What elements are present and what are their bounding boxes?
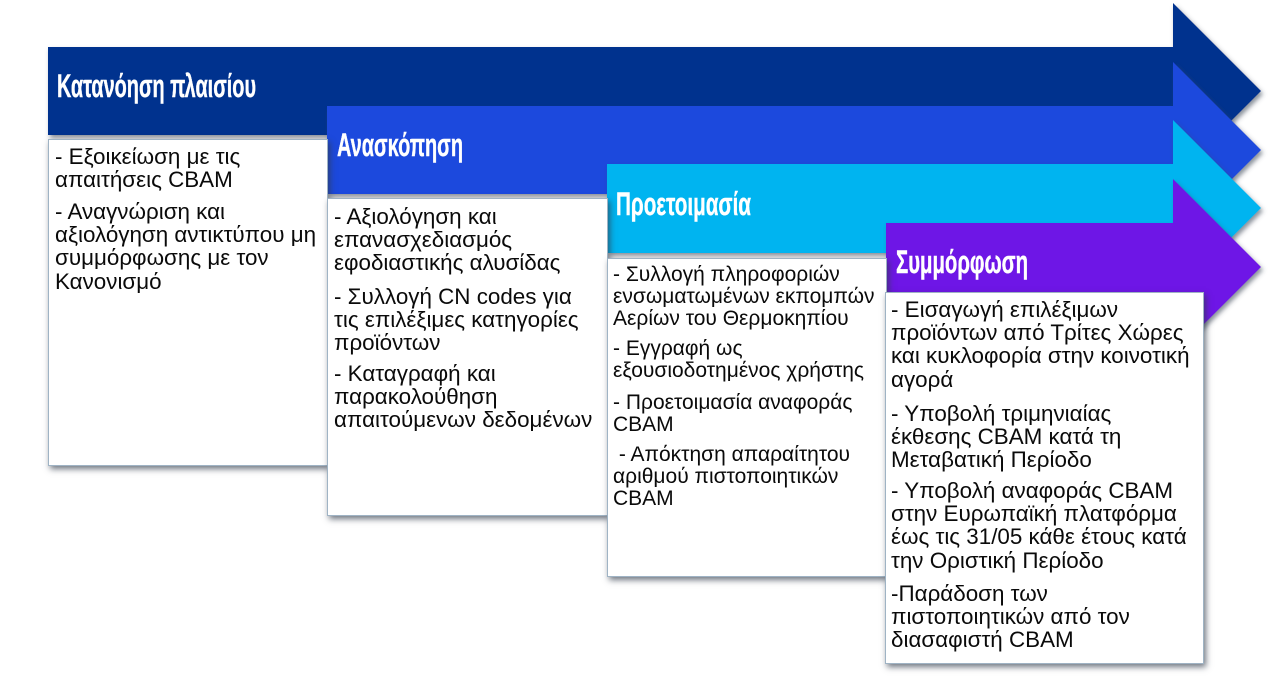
text block: - Υποβολή τριμηνιαίας έκθεσης CBAM κατά τη Μεταβατική Περίοδο	[891, 401, 1121, 472]
arrow: Συμμόρφωση	[886, 179, 1261, 355]
heading: Κατανόηση πλαισίου: Κατανόηση πλαισίου	[57, 68, 256, 104]
arrow: Προετοιμασία	[607, 120, 1261, 296]
arrow: Ανασκόπηση	[327, 62, 1261, 238]
panel: Συμμόρφωση	[885, 292, 1204, 664]
panel: Κατανόηση πλαισίου	[48, 139, 328, 466]
heading: Προετοιμασία: Προετοιμασία	[616, 186, 751, 222]
text block: - Συλλογή CN codes για τις επιλέξιμες κατηγορίες προϊόντων	[334, 284, 579, 355]
text block: - Εξοικείωση με τις απαιτήσεις CBAM	[55, 144, 240, 192]
text block: -Παράδοση των πιστοποιητικών από τον διασαφιστή CBAM	[891, 581, 1130, 652]
text block: - Απόκτηση απαραίτητου αριθμού πιστοποιητικών CBAM	[613, 443, 850, 510]
text block: - Αξιολόγηση και επανασχεδιασμός εφοδιαστικής αλυσίδας	[334, 204, 560, 275]
text block: - Προετοιμασία αναφοράς CBAM	[613, 391, 852, 436]
arrow: Κατανόηση πλαισίου	[48, 3, 1261, 179]
text block: - Συλλογή πληροφοριών ενσωματωμένων εκπομπών Αερίων του Θερμοκηπίου	[613, 263, 874, 330]
text block: - Υποβολή αναφοράς CBAM στην Ευρωπαϊκή πλατφόρμα έως τις 31/05 κάθε έτους κατά την Οριστική Περίοδο	[891, 478, 1187, 573]
text block: - Εισαγωγή επιλέξιμων προϊόντων από Τρίτες Χώρες και κυκλοφορία στην κοινοτική αγορά	[891, 297, 1190, 392]
heading: Ανασκόπηση: Ανασκόπηση	[337, 127, 463, 163]
panel: Ανασκόπηση	[327, 198, 608, 516]
text block: - Αναγνώριση και αξιολόγηση αντικτύπου μη συμμόρφωσης με τον Κανονισμό	[55, 199, 316, 294]
panel: Προετοιμασία	[607, 258, 887, 577]
text block: - Εγγραφή ως εξουσιοδοτημένος χρήστης	[613, 337, 864, 382]
heading: Συμμόρφωση: Συμμόρφωση	[896, 244, 1028, 280]
text block: - Καταγραφή και παρακολούθηση απαιτούμενων δεδομένων	[334, 361, 592, 432]
